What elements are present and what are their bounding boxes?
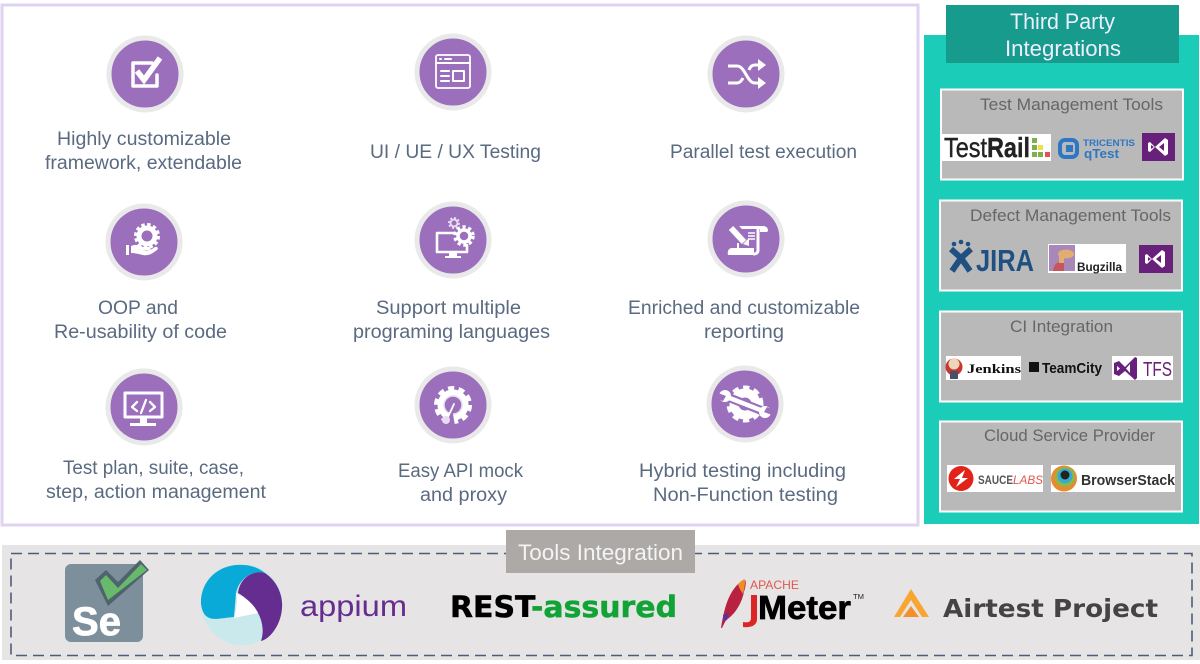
- logo: Jenkins: [946, 356, 1021, 380]
- text: re-usability of code: Re-usability of code: [54, 322, 227, 343]
- logo: REST-assured: REST-assured: [450, 590, 677, 624]
- text: non-function testing: Non-Function testing: [653, 485, 838, 506]
- text: reporting: reporting: [704, 322, 784, 343]
- logo: JMeter: TM: [853, 594, 864, 601]
- logo: Visual Studio: [1142, 133, 1175, 161]
- logo: Airtest Project: Airtest Project: [943, 594, 1158, 623]
- icon: monitor with gears: [417, 204, 489, 276]
- heading: defect management tools: Defect Management Tools: [970, 206, 1171, 225]
- heading: cloud service provider: Cloud Service Provider: [984, 426, 1155, 445]
- text: programing languages: programing languages: [353, 322, 550, 343]
- logo: JMeter: APACHE: [750, 578, 799, 592]
- feature: test plan management: [46, 371, 267, 503]
- text: hybrid testing including: Hybrid testing including: [639, 461, 846, 482]
- logo: TFS: TFS: [1143, 359, 1172, 381]
- logo: Appium: appium: [300, 590, 407, 623]
- panel: third party integrations: [924, 5, 1199, 524]
- feature: hybrid testing: [639, 368, 846, 506]
- icon: shuffle arrows: [710, 38, 782, 110]
- icon: scroll and pen: [710, 203, 782, 275]
- logo: BrowserStack: [1051, 465, 1176, 492]
- logo: Sauce Labs: [947, 465, 1043, 492]
- icon: gear and wrench: [709, 368, 781, 440]
- text: parallel test execution: Parallel test execution: [670, 142, 857, 163]
- logo: Tricentis qTest: TRICENTIS: [1083, 138, 1135, 149]
- text: test plan suite case: Test plan, suite, case,: [63, 458, 244, 479]
- icon: checkbox: [109, 38, 181, 110]
- logo: Tricentis qTest: qTest: [1084, 146, 1120, 161]
- text: highly customizable: Highly customizable: [57, 129, 231, 150]
- panel: framework features: [2, 5, 918, 525]
- feature: enriched reporting: [628, 203, 860, 343]
- card: CI integration: [940, 312, 1182, 402]
- feature: OOP and re-usability: [54, 206, 227, 343]
- heading: third party integrations: [946, 5, 1179, 63]
- logo: JMeter: [721, 578, 864, 628]
- heading: third party integrations: Integrations: [1005, 36, 1121, 61]
- heading: test management tools: Test Management Tools: [980, 95, 1163, 114]
- text: UI / UE / UX Testing: UI / UE / UX Testing: [370, 142, 541, 163]
- heading: tools integration: Tools Integration: [518, 540, 683, 565]
- icon: browser window: [417, 36, 489, 108]
- logo: TestRail: TestRail: [944, 132, 1030, 163]
- feature: highly customizable framework: [45, 38, 242, 174]
- text: enriched and customizable: Enriched and customizable: [628, 298, 860, 319]
- logo: JIRA: [951, 240, 1034, 278]
- panel: tools integration: [2, 530, 1200, 660]
- heading: tools integration: [506, 530, 695, 573]
- logo: Airtest Project: [894, 589, 1158, 623]
- card: cloud service provider: [940, 422, 1182, 512]
- logo: TFS: [1112, 356, 1173, 381]
- heading: CI integration: CI Integration: [1010, 317, 1113, 336]
- text: OOP and: OOP and: [98, 298, 178, 319]
- logo: BrowserStack: BrowserStack: [1081, 472, 1176, 489]
- card: defect management tools: [940, 200, 1182, 290]
- logo: Jenkins: Jenkins: [967, 361, 1021, 376]
- logo: Bugzilla: [1048, 244, 1126, 274]
- icon: monitor with code: [108, 371, 180, 443]
- icon: hand with gear: [108, 206, 180, 278]
- logo: Sauce Labs: LABS: [1013, 473, 1043, 487]
- text: easy API mock: Easy API mock: [398, 461, 523, 482]
- logo: Visual Studio: [1139, 245, 1173, 273]
- feature: UI UE UX testing: [370, 36, 541, 163]
- feature: API mock and proxy: [398, 369, 523, 506]
- text: framework extendable: framework, extendable: [45, 153, 242, 174]
- logo: JMeter: Meter: [758, 589, 851, 626]
- logo: Selenium: [65, 560, 149, 644]
- logo: Bugzilla: Bugzilla: [1077, 260, 1122, 274]
- icon: gear with probe: [417, 369, 489, 441]
- text: and proxy: and proxy: [420, 485, 508, 506]
- logo: Selenium: Se: [72, 600, 121, 644]
- feature: parallel test execution: [670, 38, 857, 163]
- heading: third party integrations: Third Party: [1010, 9, 1115, 34]
- text: step action management: step, action management: [46, 482, 267, 503]
- text: support multiple: Support multiple: [376, 298, 521, 319]
- logo: JIRA: JIRA: [976, 243, 1034, 278]
- logo: Appium: [201, 564, 407, 645]
- logo: Sauce Labs: SAUCE: [978, 473, 1013, 487]
- logo: Tricentis qTest: [1060, 138, 1135, 161]
- card: test management tools: [941, 90, 1183, 180]
- logo: TeamCity: TeamCity: [1042, 360, 1103, 377]
- feature: multiple programing languages: [353, 204, 550, 343]
